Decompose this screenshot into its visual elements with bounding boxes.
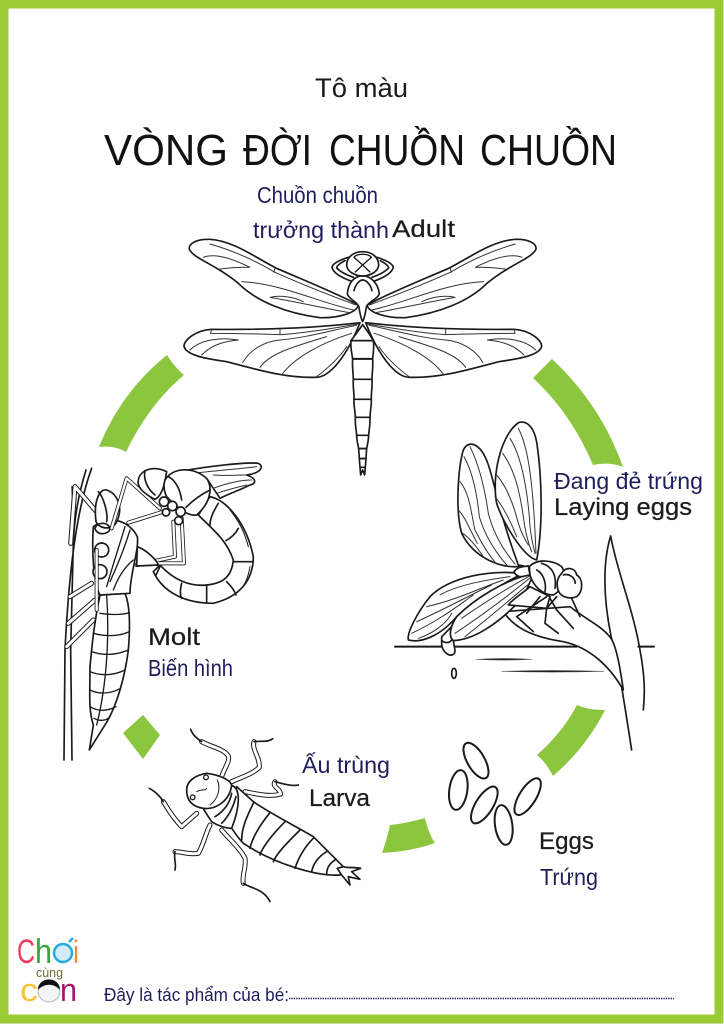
label: larva: Larva — [309, 785, 371, 812]
label: eggs: Eggs — [539, 828, 594, 855]
logo: Chơi cùng con: n — [60, 972, 77, 1008]
label: laying eggs: Laying eggs — [554, 494, 692, 521]
cycle arrow: eggs to larva — [382, 818, 435, 853]
title: VÒNG — [104, 126, 228, 175]
illustration: larva — [149, 729, 361, 902]
label: molt: Biến hình — [148, 655, 233, 681]
logo: Chơi cùng con: cùng — [36, 965, 63, 980]
title: CHUỒN — [329, 125, 465, 175]
label: eggs: Trứng — [540, 864, 598, 890]
label: adult: Adult — [392, 216, 455, 243]
label: eggs — [539, 828, 598, 890]
label: adult: trưởng thành — [253, 217, 389, 243]
label: larva — [302, 751, 390, 812]
cycle arrow: laying eggs to eggs — [537, 705, 605, 776]
cycle arrow: molt to adult — [99, 355, 184, 452]
cycle arrow: adult to laying eggs — [533, 359, 623, 467]
illustration: eggs — [447, 739, 546, 846]
label: laying eggs — [554, 468, 703, 521]
logo: Chơi cùng con: h — [35, 933, 52, 971]
subtitle: Tô màu — [315, 73, 408, 103]
logo: Chơi cùng con: c — [20, 972, 38, 1008]
illustration: dragonfly laying eggs — [395, 422, 654, 750]
label: molt — [148, 624, 233, 681]
logo: Chơi cùng con — [17, 933, 79, 1008]
title — [104, 125, 617, 175]
illustration: molting dragonfly — [64, 463, 261, 760]
label: adult — [253, 182, 455, 243]
label: molt: Molt — [148, 624, 200, 651]
label: laying eggs: Đang đẻ trứng — [554, 468, 703, 494]
logo: Chơi cùng con: C — [17, 933, 35, 971]
cycle arrow: larva to molt — [123, 715, 160, 759]
logo: Chơi cùng con: i — [73, 934, 79, 970]
title: CHUỒN — [480, 125, 617, 175]
label: larva: Ấu trùng — [302, 751, 390, 778]
illustration: adult dragonfly — [184, 239, 542, 475]
title: ĐỜI — [243, 126, 312, 175]
signature line: Đây là tác phẩm của bé: — [104, 985, 289, 1005]
label: adult: Chuồn chuồn — [257, 182, 378, 208]
